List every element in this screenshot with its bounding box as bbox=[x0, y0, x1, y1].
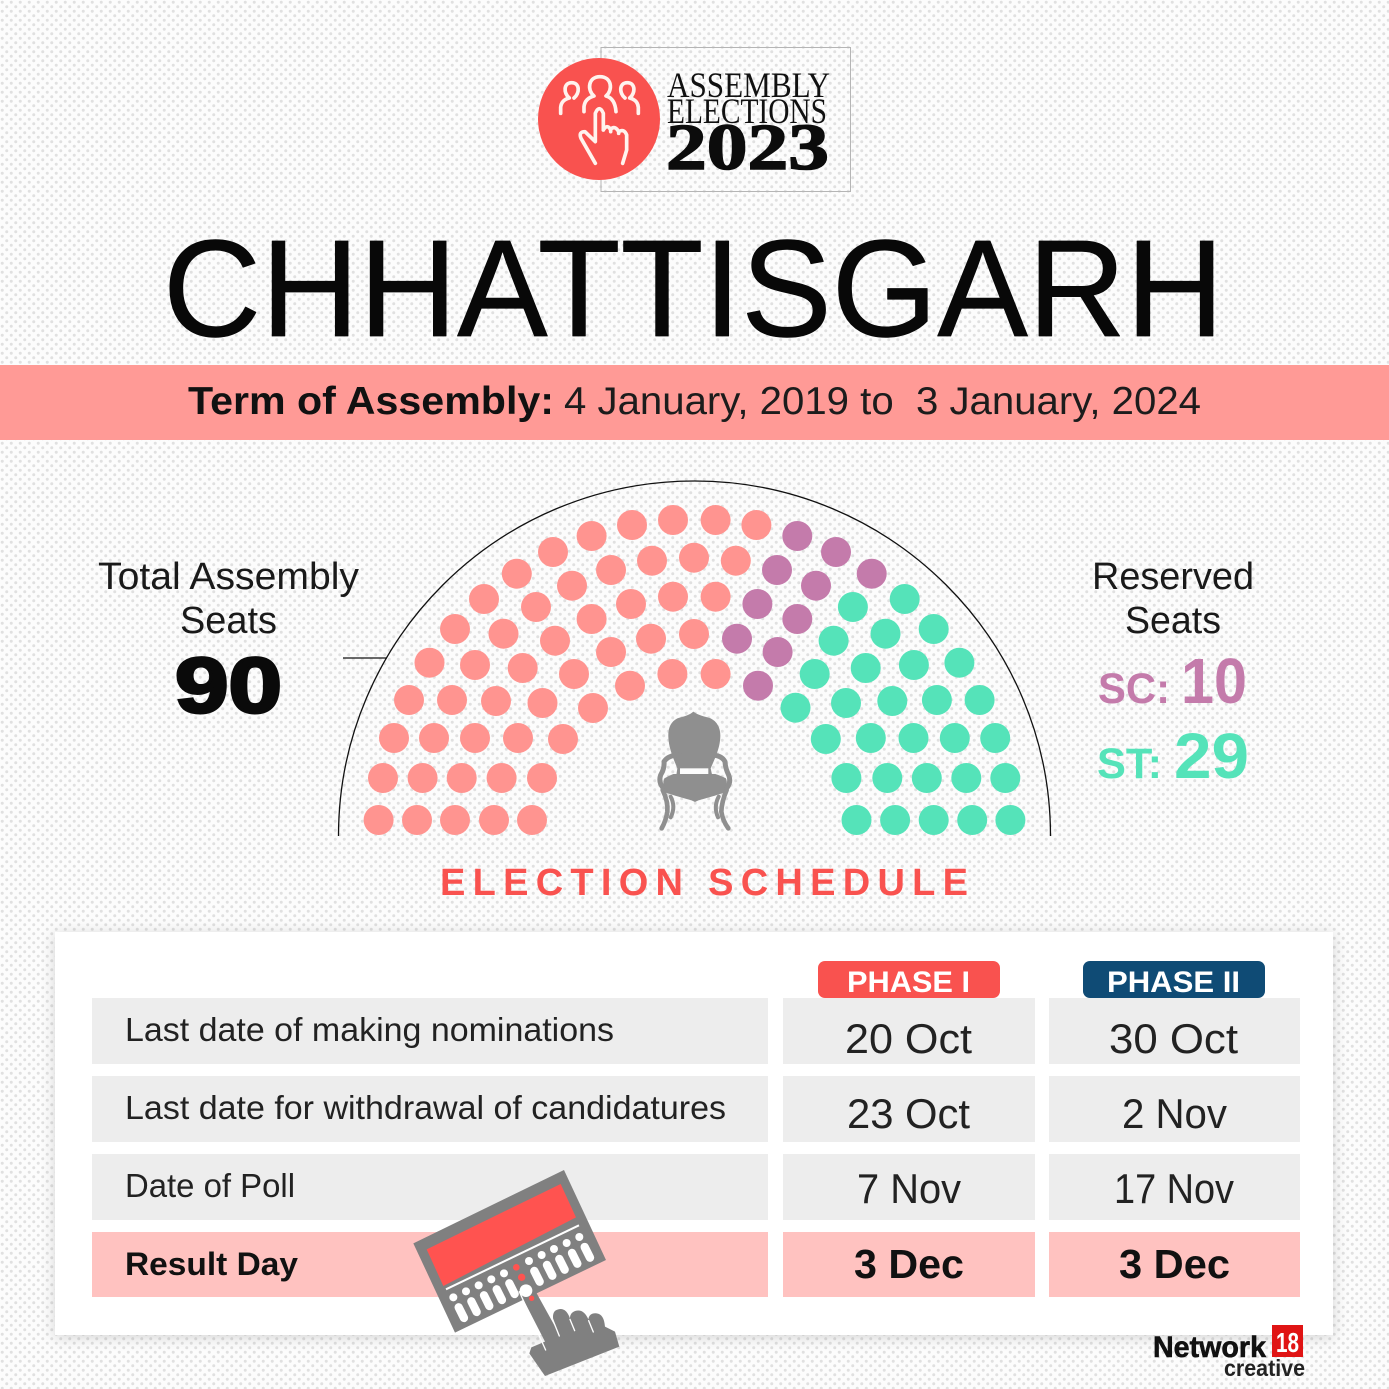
seats: ST (green) bbox=[780, 584, 1025, 835]
row: nominations: 20 Oct bbox=[845, 1015, 972, 1062]
reserved seats: Reserved bbox=[1092, 556, 1254, 598]
total assembly seats bbox=[98, 556, 359, 729]
leader line bbox=[343, 657, 387, 659]
badge: phase I: PHASE I bbox=[847, 966, 970, 999]
SC count: SC: bbox=[1098, 665, 1170, 713]
row: withdrawal: 2 Nov bbox=[1122, 1090, 1227, 1137]
total assembly seats: Total Assembly bbox=[98, 556, 359, 598]
logo: Assembly Elections 2023 bbox=[538, 48, 850, 192]
row: nominations bbox=[92, 998, 1300, 1064]
row: result day: 3 Dec bbox=[1119, 1241, 1230, 1287]
banner: term of assembly bbox=[0, 365, 1389, 440]
seats: general (coral) bbox=[364, 505, 771, 835]
badge: phase I bbox=[818, 961, 1000, 999]
row: nominations: 30 Oct bbox=[1109, 1015, 1238, 1062]
row: date of poll: 17 Nov bbox=[1114, 1165, 1234, 1212]
icon: voting machine and hand bbox=[413, 1170, 619, 1376]
total assembly seats: 90 bbox=[175, 641, 282, 729]
hand bbox=[519, 1286, 619, 1376]
row: date of poll bbox=[92, 1154, 1300, 1220]
row: result day bbox=[92, 1232, 1300, 1297]
row: date of poll: 7 Nov bbox=[857, 1165, 961, 1212]
SC count bbox=[1098, 645, 1247, 717]
title: CHHATTISGARH bbox=[163, 212, 1224, 366]
panel: schedule table bbox=[55, 932, 1333, 1335]
banner: term of assembly: 4 January, 2019 to 3 January, 2024 bbox=[564, 380, 1201, 423]
badge: phase II bbox=[1083, 961, 1265, 999]
banner: term of assembly: Term of Assembly: bbox=[188, 380, 554, 423]
reserved seats: Seats bbox=[1125, 600, 1221, 642]
icon: voters and pointing hand bbox=[538, 58, 660, 180]
row: withdrawal: 23 Oct bbox=[847, 1090, 970, 1137]
logo wordmark: ASSEMBLY bbox=[667, 65, 830, 105]
ST count: ST: bbox=[1097, 740, 1162, 788]
row: withdrawal: Last date for withdrawal of candidatures bbox=[125, 1089, 726, 1126]
reserved seats bbox=[1092, 556, 1254, 792]
total assembly seats: Seats bbox=[180, 600, 277, 642]
logo wordmark bbox=[666, 65, 830, 184]
chamber arc bbox=[338, 481, 1050, 836]
logo: Network18 creative: Network bbox=[1153, 1331, 1266, 1364]
row: nominations: Last date of making nominations bbox=[125, 1011, 614, 1048]
icon: speaker's chair bbox=[660, 712, 730, 828]
logo: Network18 creative bbox=[1153, 1325, 1305, 1381]
ST count: 29 bbox=[1174, 720, 1249, 792]
seats: SC (purple) bbox=[722, 521, 887, 701]
row: result day: Result Day bbox=[125, 1246, 298, 1282]
row: date of poll: Date of Poll bbox=[125, 1167, 295, 1204]
row: result day: 3 Dec bbox=[854, 1241, 964, 1287]
badge: phase II: PHASE II bbox=[1107, 966, 1240, 999]
heading: election schedule: ELECTION SCHEDULE bbox=[440, 862, 968, 904]
logo: Network18 creative: 18 bbox=[1276, 1327, 1299, 1358]
logo wordmark: ELECTIONS bbox=[667, 91, 827, 131]
ST count bbox=[1097, 720, 1249, 792]
row: withdrawal bbox=[92, 1076, 1300, 1142]
SC count: 10 bbox=[1181, 645, 1247, 717]
logo wordmark: 2023 bbox=[666, 111, 829, 184]
logo: Network18 creative: creative bbox=[1224, 1355, 1305, 1381]
